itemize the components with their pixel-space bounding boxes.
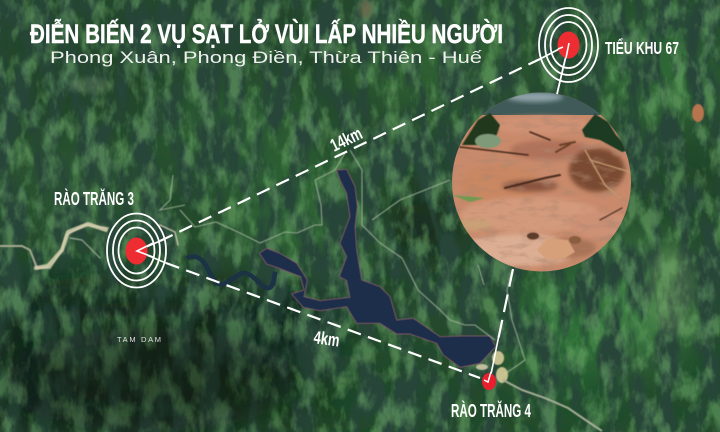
- photo: debris and rocks: [460, 132, 630, 220]
- photo: mud texture: [450, 115, 635, 275]
- distance label: 14km: 14km: [327, 123, 365, 156]
- connector: Rào Trăng 3 to Rào Trăng 4, 4km: [137, 251, 480, 378]
- label: Rào Trăng 4: RÀO TRĂNG 4: [451, 400, 531, 421]
- connector: Rào Trăng 3 to Tiểu khu 67, 14km: [137, 47, 563, 251]
- label: Tiểu khu 67: TIỂU KHU 67: [605, 37, 679, 58]
- dam area near Rào Trăng 4: [476, 351, 602, 431]
- marker: Tiểu khu 67: [539, 8, 598, 82]
- road and cleared area near Rào Trăng 3: [0, 224, 178, 268]
- marker: Rào Trăng 4: [482, 372, 496, 390]
- title: ĐIỄN BIẾN 2 VỤ SẠT LỞ VÙI LẤP NHIỀU NGƯỜI: [30, 17, 503, 49]
- lake: [187, 169, 496, 367]
- marker: Rào Trăng 3: [107, 214, 166, 288]
- photo: hill and sky: [482, 92, 600, 115]
- subtitle: Phong Xuân, Phong Điền, Thừa Thiên - Huế: [50, 48, 483, 67]
- photo: mud tones: [457, 116, 630, 266]
- photo: vegetation: [452, 113, 630, 202]
- connector: Tiểu khu 67 to photo to Rào Trăng 4: [490, 43, 569, 379]
- label: Tam Dam: TAM DAM: [117, 335, 161, 344]
- photo: boulder: [527, 232, 581, 261]
- roads: [160, 150, 525, 375]
- distance label: 4km: 4km: [312, 327, 341, 351]
- landslide photo: [450, 90, 635, 275]
- label: Rào Trăng 3: RÀO TRĂNG 3: [54, 188, 134, 209]
